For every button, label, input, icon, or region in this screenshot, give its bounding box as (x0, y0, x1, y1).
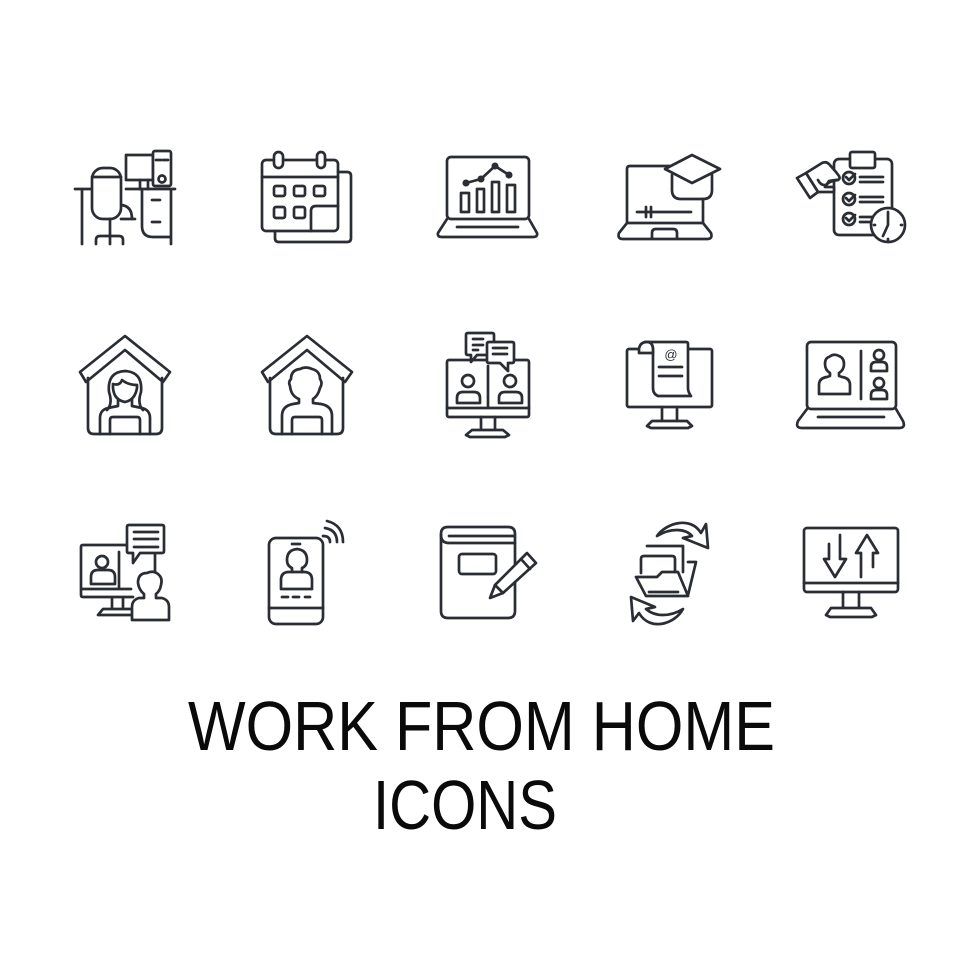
icon: email document on monitor: @ (664, 347, 678, 362)
icon: checklist with clock and hand (797, 152, 905, 242)
icon: woman working at home (80, 336, 170, 434)
icon: laptop with chart (438, 157, 537, 237)
icon: email document on monitor (627, 342, 712, 428)
icon: person on video call with chat bubble (81, 525, 169, 620)
title: ICONS (373, 766, 557, 844)
icon: calendar (262, 152, 351, 242)
icon: monitor with up and down arrows (804, 528, 898, 617)
icon: laptop with graduation cap (618, 155, 720, 239)
title (188, 687, 775, 844)
icon: folder sync arrows (631, 523, 708, 624)
icon: notebook and pencil (441, 527, 536, 618)
title: WORK FROM HOME (188, 687, 775, 765)
icon: smartphone video call with wifi (269, 521, 343, 624)
icon: man working at home (262, 336, 352, 434)
icon: home office desk (75, 151, 175, 244)
icon: video call monitor with chat bubbles (447, 333, 529, 437)
icon: laptop group video call (797, 342, 904, 428)
